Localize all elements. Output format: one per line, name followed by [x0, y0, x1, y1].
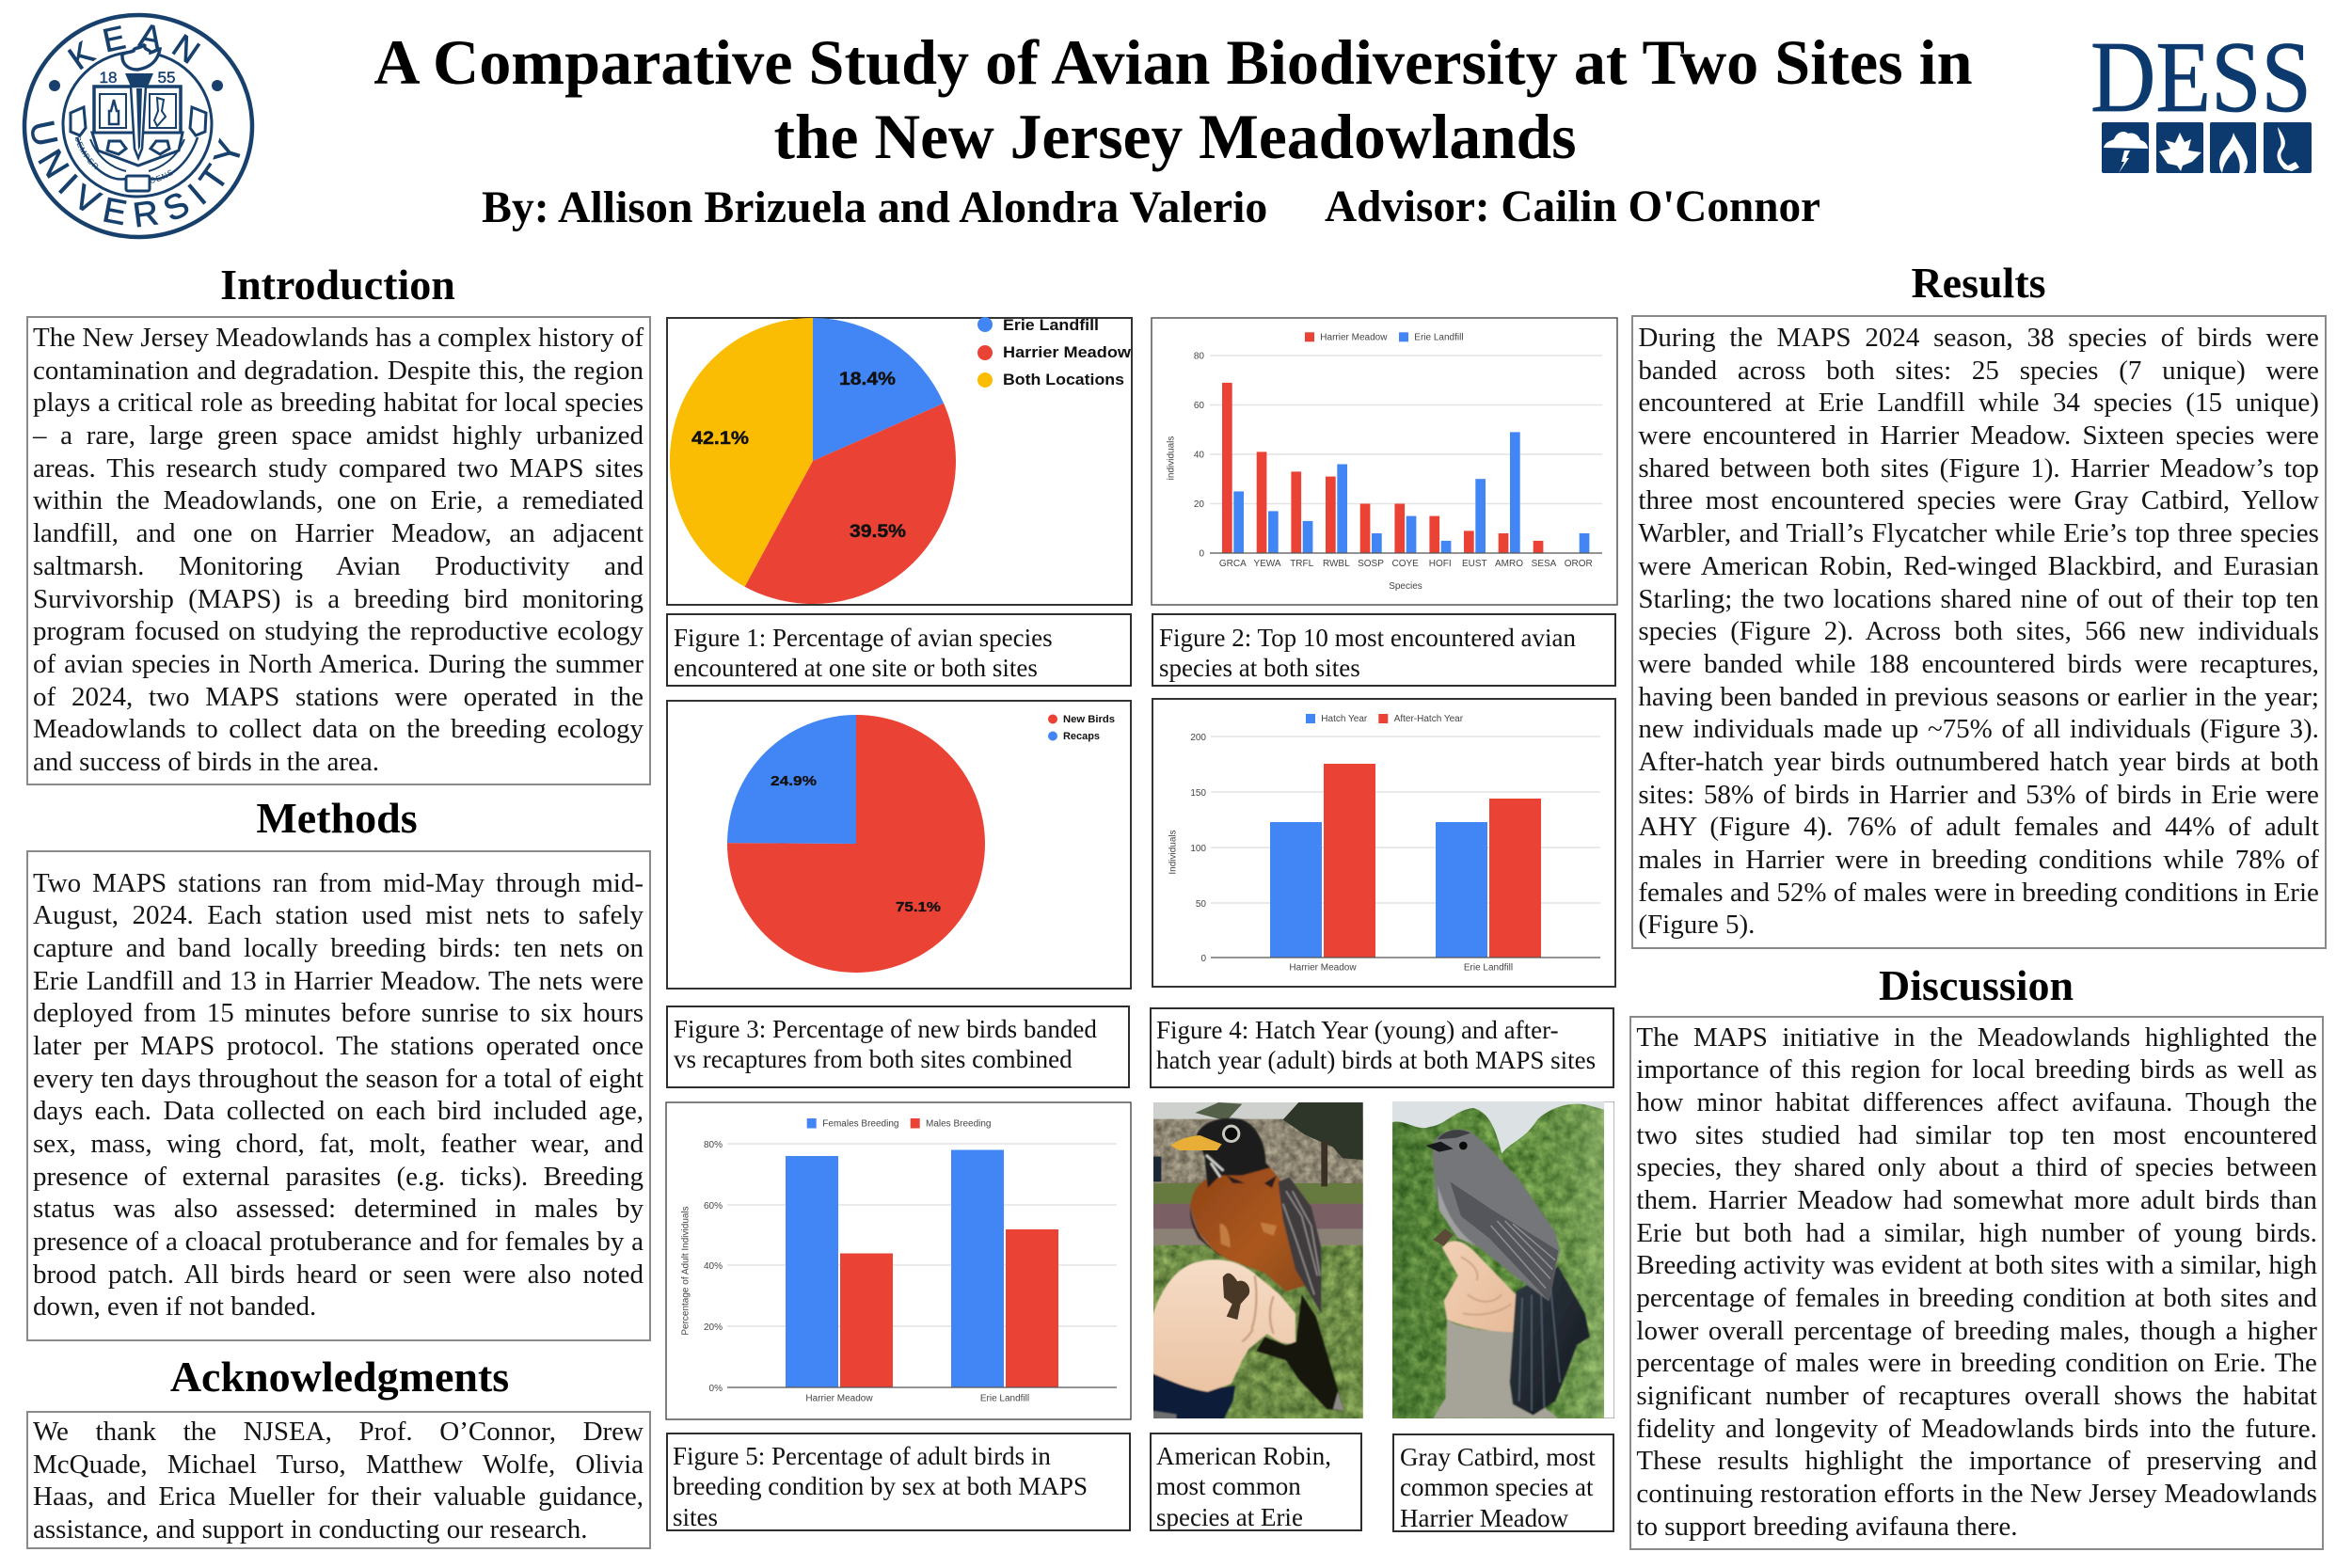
text block: discussion: them. Harrier Meadow had somewhat more adult birds than	[1636, 1185, 2317, 1215]
logo: Kean University seal: UNIVERSITY	[31, 120, 241, 228]
text block: introduction: program focused on studying the reproductive ecology	[33, 616, 644, 646]
axis labels: HOFI	[1429, 559, 1452, 569]
axis labels: SOSP	[1358, 559, 1384, 569]
text block: results: males in Harrier were in breeding conditions while 78% of	[1638, 845, 2319, 875]
axis labels: 20%	[704, 1323, 723, 1333]
icon: maple leaf	[2156, 122, 2203, 173]
caption: figure 1	[666, 613, 1132, 687]
legend: New Birds	[1063, 714, 1115, 725]
axis labels: SESA	[1532, 559, 1557, 569]
legend: Erie Landfill	[1003, 317, 1099, 334]
text block: discussion: species, they shared only about a third of species between	[1636, 1152, 2317, 1182]
heading: Methods: Methods	[256, 794, 418, 842]
panel: introduction text box	[26, 316, 651, 785]
text block: results: banded across both sites: 25 species (7 unique) were	[1638, 356, 2319, 386]
sleeve	[1152, 1373, 1235, 1423]
text block: acknowledgments: McQuade, Michael Turso, Matthew Wolfe, Olivia	[33, 1449, 644, 1480]
caption: Gray Catbird: common species at	[1400, 1473, 1593, 1501]
axis labels: Erie Landfill	[980, 1394, 1029, 1403]
wing	[1279, 1177, 1321, 1313]
text block: discussion: percentage of males were in breeding condition on Erie. The	[1636, 1348, 2317, 1378]
bars: Hatch Year	[1270, 822, 1487, 958]
chart: figure 1 pie: 18.4%	[839, 370, 896, 389]
axis labels: Harrier Meadow	[805, 1394, 873, 1403]
text block: discussion	[1636, 1022, 2317, 1542]
text block: acknowledgments: Haas, and Erica Mueller for their valuable guidance,	[33, 1481, 644, 1512]
axis labels: 80	[1194, 352, 1204, 361]
text block: introduction	[32, 323, 644, 777]
legend	[807, 1118, 991, 1129]
heading: Results: Results	[1911, 258, 2046, 307]
logo: Kean University seal	[23, 13, 254, 239]
text block: methods: sex, mass, wing chord, fat, molt, feather wear, and	[33, 1129, 644, 1159]
caption: Gray Catbird: Harrier Meadow	[1400, 1504, 1568, 1532]
bars: Erie Landfill	[1233, 432, 1589, 553]
caption: figure 5	[666, 1433, 1131, 1531]
chart: figure 3 pie: 75.1%	[896, 899, 941, 915]
axis labels: OROR	[1565, 559, 1593, 569]
axis labels: 200	[1190, 733, 1206, 743]
text block: methods: Two MAPS stations ran from mid-May through mid-	[33, 867, 644, 897]
icon: plant	[2264, 122, 2312, 173]
axis labels: individuals	[1167, 436, 1176, 480]
chart: figure 1 pie	[666, 317, 1133, 606]
text block: results: having been banded in previous seasons or earlier in the year;	[1638, 682, 2319, 712]
text block: introduction: contamination and degradation. Despite this, the region	[33, 356, 644, 386]
text block: discussion: These results highlight the importance of preserving and	[1636, 1446, 2317, 1476]
text block: results: sites: 58% of birds in Harrier and 53% of birds in Erie were	[1638, 780, 2319, 810]
chart: figure 5 grouped bars	[665, 1101, 1132, 1420]
logo: Kean University seal: KEAN	[68, 24, 201, 70]
text block: methods: days each. Data collected on each bird included age,	[33, 1096, 644, 1126]
heading: Discussion: Discussion	[1879, 961, 2074, 1008]
text block: results: During the MAPS 2024 season, 38 species of birds were	[1638, 323, 2319, 353]
caption: figure 4: Figure 4: Hatch Year (young) and after-	[1156, 1016, 1559, 1044]
axis labels: 0%	[709, 1384, 723, 1394]
caption: figure 4: hatch year (adult) birds at both MAPS sites	[1156, 1046, 1596, 1074]
text block: introduction: saltmarsh. Monitoring Avian Productivity and	[33, 551, 644, 581]
text block: discussion: Breeding activity was evident at both sites with a similar, high	[1636, 1250, 2317, 1280]
text block: acknowledgments: We thank the NJSEA, Prof. O’Connor, Drew	[33, 1417, 644, 1447]
chart: figure 3 pie	[666, 700, 1132, 990]
caption: Gray Catbird	[1392, 1433, 1614, 1532]
caption: figure 1: Figure 1: Percentage of avian species	[674, 624, 1053, 652]
axis labels: EUST	[1462, 559, 1487, 569]
breast	[1190, 1167, 1307, 1291]
caption: American Robin	[1150, 1433, 1362, 1531]
legend: Males Breeding	[926, 1119, 991, 1129]
text block: acknowledgments	[33, 1417, 644, 1544]
axis labels: 20	[1194, 499, 1204, 510]
cap	[1438, 1130, 1470, 1139]
bars: After-Hatch Year	[1324, 764, 1541, 958]
caption: figure 3: vs recaptures from both sites combined	[674, 1045, 1073, 1073]
text block: results: AHY (Figure 4). 76% of adult females and 44% of adult	[1638, 812, 2319, 842]
axis labels: 50	[1196, 899, 1206, 910]
text block: acknowledgments: assistance, and support in conducting our research.	[33, 1514, 587, 1544]
bars: Females Breeding	[786, 1149, 1004, 1387]
crest	[70, 43, 208, 192]
tail	[1256, 1294, 1344, 1411]
text block: introduction: areas. This research study compared two MAPS sites	[33, 453, 644, 483]
hand	[1442, 1241, 1516, 1332]
bars: Harrier Meadow	[1222, 383, 1543, 553]
legend	[1305, 332, 1464, 342]
axis labels: Species	[1389, 581, 1422, 592]
caption: figure 5: breeding condition by sex at both MAPS	[673, 1472, 1088, 1500]
axis labels: Percentage of Adult Individuals	[681, 1206, 691, 1336]
axis labels: Individuals	[1168, 830, 1178, 875]
caption: American Robin: species at Erie	[1156, 1503, 1303, 1531]
axis labels: Harrier Meadow	[1289, 963, 1357, 973]
slice: Erie Landfill	[813, 318, 944, 461]
axis labels: TRFL	[1290, 559, 1314, 569]
beak	[1426, 1142, 1454, 1152]
legend: Recaps	[1063, 731, 1100, 742]
chart: figure 3 pie: 24.9%	[771, 773, 817, 789]
text block: methods: August, 2024. Each station used mist nets to safely	[33, 900, 644, 930]
text block: results: were encountered in Harrier Meadow. Sixteen species were	[1638, 420, 2319, 451]
text block: methods	[33, 867, 644, 1322]
icon: flame	[2210, 122, 2256, 173]
text block: results: new individuals made up ~75% of all individuals (Figure 3).	[1638, 714, 2319, 744]
slice: Harrier Meadow	[745, 404, 956, 604]
legend	[1048, 714, 1115, 742]
text block: introduction: within the Meadowlands, one on Erie, a remediated	[33, 485, 644, 515]
text block: introduction: Survivorship (MAPS) is a breeding bird monitoring	[33, 583, 644, 613]
eye	[1222, 1125, 1240, 1143]
text block: introduction: and success of birds in the area.	[33, 747, 379, 777]
text block: introduction: of avian species in North America. During the summer	[33, 649, 644, 679]
bars: Males Breeding	[840, 1229, 1058, 1387]
legend: Hatch Year	[1321, 714, 1368, 724]
axis labels: GRCA	[1219, 559, 1247, 569]
legend: Females Breeding	[822, 1119, 898, 1129]
text block: methods: Erie Landfill and 13 in Harrier Meadow. The nets were	[33, 966, 644, 996]
axis labels: 60%	[704, 1201, 723, 1212]
caption: figure 5: sites	[673, 1503, 718, 1531]
crest: SEMPER	[75, 136, 98, 169]
text block: methods: every ten days throughout the season for a total of eight	[33, 1064, 644, 1094]
panel: discussion text box	[1629, 1016, 2324, 1550]
text block: discussion: continuing restoration efforts in the New Jersey Meadowlands	[1636, 1479, 2317, 1509]
caption: figure 4	[1150, 1007, 1614, 1088]
advisor: Advisor: Cailin O'Connor	[1325, 182, 1820, 231]
text block: discussion: significant number of recaptures overall shows the habitat	[1636, 1381, 2317, 1411]
tail	[1510, 1266, 1590, 1416]
text block: discussion: importance of this region for local breeding birds as well as	[1636, 1054, 2317, 1085]
axis labels: 150	[1190, 788, 1206, 799]
text block: introduction: plays a critical role as breeding habitat for local species	[33, 388, 644, 418]
hand	[1152, 1259, 1295, 1392]
text block: results: shared between both sites (Figure 1). Harrier Meadow’s top	[1638, 453, 2319, 483]
text block: methods: later per MAPS protocol. The stations operated once	[33, 1031, 644, 1061]
head	[1197, 1118, 1270, 1188]
text block: results: were banded while 188 encountered birds were recaptures,	[1638, 649, 2319, 679]
text block: discussion: two sites studied had similar top ten most encountered	[1636, 1120, 2317, 1150]
chart: figure 4 grouped bars	[1152, 698, 1616, 988]
caption: American Robin: most common	[1156, 1472, 1301, 1500]
sleeve	[1433, 1320, 1558, 1418]
text block: methods: presence of a cloacal protuberance and for females by a	[33, 1227, 644, 1257]
chart: figure 2 grouped bars	[1151, 317, 1618, 606]
legend: Harrier Meadow	[1320, 333, 1388, 342]
text block: discussion: Erie but both had a similar, high number of young birds.	[1636, 1218, 2317, 1248]
heading: Acknowledgments: Acknowledgments	[170, 1353, 509, 1401]
axis labels: 40	[1194, 450, 1204, 461]
panel: methods text box	[26, 850, 651, 1341]
axis labels: 60	[1194, 401, 1204, 411]
text block: introduction: The New Jersey Meadowlands has a complex history of	[33, 323, 644, 353]
caption: figure 3	[666, 1006, 1130, 1088]
beak	[1170, 1135, 1222, 1150]
text block: results: females and 52% of males were in breeding conditions in Erie	[1638, 878, 2319, 908]
legend: Erie Landfill	[1414, 333, 1464, 342]
text block: results: three most encountered species were Gray Catbird, Yellow	[1638, 485, 2319, 515]
crest: 18	[100, 69, 117, 87]
axis labels: RWBL	[1323, 559, 1350, 569]
panel: results text box	[1631, 315, 2327, 949]
text block: results: Warbler, and Triall’s Flycatcher while Erie’s top three species	[1638, 518, 2319, 548]
crest: DISCENS	[151, 169, 173, 182]
text block: results: encountered at Erie Landfill while 34 species (15 unique)	[1638, 388, 2319, 418]
axis labels	[1168, 733, 1513, 973]
chart: figure 1 pie: 42.1%	[691, 429, 749, 449]
text block: methods: brood patch. All birds heard or seen were also noted	[33, 1259, 644, 1290]
legend	[977, 317, 1131, 388]
slice: Recaps	[727, 715, 856, 844]
axis labels: 40%	[704, 1261, 723, 1272]
axis labels: 100	[1190, 844, 1206, 854]
caption: figure 1: encountered at one site or both sites	[674, 654, 1038, 682]
caption: Gray Catbird: Gray Catbird, most	[1400, 1443, 1596, 1471]
slice: New Birds	[727, 715, 985, 973]
slice: Both Locations	[670, 318, 813, 587]
text block: methods: status was also assessed: determined in males by	[33, 1194, 644, 1224]
foot	[1433, 1228, 1454, 1246]
eye	[1459, 1142, 1468, 1149]
text block: methods: presence of external parasites (e.g. ticks). Breeding	[33, 1162, 644, 1192]
axis labels: Erie Landfill	[1464, 963, 1513, 973]
text block: results: species (Figure 2). Across both sites, 566 new individuals	[1638, 616, 2319, 646]
axis labels: 0	[1199, 549, 1204, 559]
icon: storm cloud	[2102, 122, 2149, 173]
text block: results: were American Robin, Red-winged Blackbird, and Eurasian	[1638, 551, 2319, 581]
text block: discussion: lower overall percentage of breeding males, though a higher	[1636, 1316, 2317, 1346]
caption: figure 2: species at both sites	[1159, 654, 1360, 682]
photo: American Robin held in hand	[1153, 1102, 1363, 1418]
text block: discussion: percentage of females in breeding condition at both sites and	[1636, 1283, 2317, 1313]
axis labels: 80%	[704, 1140, 723, 1150]
text block: methods: capture and band locally breeding birds: ten nets on	[33, 933, 644, 963]
authors: By: Allison Brizuela and Alondra Valerio	[482, 182, 1267, 232]
caption: figure 5: Figure 5: Percentage of adult birds in	[673, 1442, 1051, 1470]
chart: figure 1 pie: 39.5%	[850, 522, 906, 542]
text block: discussion: fidelity and longevity of Meadowlands birds into the future.	[1636, 1414, 2317, 1444]
wing	[1450, 1181, 1558, 1301]
legend: After-Hatch Year	[1394, 714, 1464, 724]
text block: introduction: landfill, and one on Harrier Meadow, an adjacent	[33, 518, 644, 548]
text block: results: Starling; the two locations shared nine of out of their top ten	[1638, 583, 2319, 613]
foot	[1223, 1274, 1249, 1320]
text block: introduction: Meadowlands to collect data on the breeding ecology	[33, 714, 644, 744]
text block: discussion: The MAPS initiative in the Meadowlands highlighted the	[1636, 1022, 2317, 1052]
axis labels: YEWA	[1253, 559, 1281, 569]
heading: Introduction: Introduction	[220, 260, 455, 309]
text block: introduction: – a rare, large green space amidst highly urbanized	[33, 420, 644, 451]
crest: 55	[158, 69, 175, 87]
body	[1433, 1130, 1560, 1301]
caption: American Robin: American Robin,	[1156, 1442, 1331, 1470]
panel: acknowledgments text box	[26, 1411, 651, 1548]
text block: introduction: of 2024, two MAPS stations were operated in the	[33, 682, 644, 712]
caption: figure 3: Figure 3: Percentage of new birds banded	[674, 1015, 1097, 1043]
text block: methods: down, even if not banded.	[33, 1291, 316, 1322]
legend: Harrier Meadow	[1003, 344, 1131, 361]
caption: figure 2	[1152, 613, 1616, 687]
axis labels	[1167, 352, 1593, 592]
text block: discussion: how minor habitat differences affect avifauna. Though the	[1636, 1087, 2317, 1117]
axis labels	[681, 1140, 1029, 1403]
text block: results: (Figure 5).	[1638, 910, 1755, 940]
axis labels: AMRO	[1495, 559, 1523, 569]
text block: results	[1638, 323, 2319, 940]
axis labels: 0	[1200, 954, 1206, 964]
photo: Gray Catbird held in hand	[1392, 1101, 1614, 1418]
text block: results: After-hatch year birds outnumbered hatch year birds at both	[1638, 747, 2319, 777]
legend: Both Locations	[1003, 372, 1124, 388]
text block: discussion: to support breeding avifauna there.	[1636, 1512, 2017, 1542]
title: A Comparative Study of Avian Biodiversity at Two Sites in	[373, 26, 1973, 98]
axis labels: COYE	[1392, 559, 1419, 569]
text block: methods: deployed from 15 minutes before sunrise to six hours	[33, 998, 644, 1028]
title second line: the New Jersey Meadowlands	[773, 102, 1577, 172]
caption: figure 2: Figure 2: Top 10 most encountered avian	[1159, 624, 1576, 652]
legend	[1306, 714, 1464, 724]
